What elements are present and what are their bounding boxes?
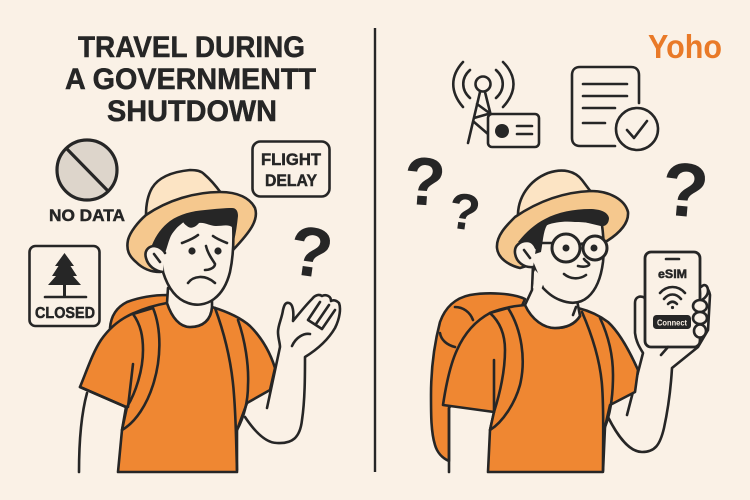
neck [167,288,212,327]
icon: no data sign [49,140,125,225]
icon: flight delay sign: DELAY [265,171,318,190]
facial features [578,259,589,267]
left arm [79,393,87,472]
backpack straps [490,308,523,430]
backpack [431,293,525,461]
title: A GOVERNMENTT [65,63,316,96]
question marks: right panel [401,143,712,242]
icon: document with checkmark [572,67,658,150]
backpack top [110,295,170,335]
glasses [541,234,607,262]
logo: Yoho: Yoho [648,28,722,65]
hair [152,208,238,253]
facial features [188,247,196,255]
smartphone [645,252,700,347]
figure: happy traveller with phone [431,171,710,472]
fingers [701,285,708,300]
arm and hand [608,287,710,452]
ear [145,246,165,272]
hat brim [497,191,628,268]
icon: no data sign: NO DATA [49,206,125,225]
question marks: right panel: ? [401,143,448,221]
hat brim [127,192,256,272]
ear [515,241,536,267]
question marks: right panel: ? [445,181,484,242]
question marks: right panel: ? [658,146,712,235]
raised arm and hand [245,295,340,443]
hat crown [146,170,221,225]
smartphone: eSIM [658,267,687,281]
title: TRAVEL DURING [78,31,305,64]
hat crown [518,171,591,225]
backpack straps [122,308,159,430]
icon: flight delay sign: FLIGHT [261,150,322,169]
question mark: left panel: ? [284,211,338,294]
neck [525,265,580,328]
icon: cell tower and card [453,62,539,147]
face [530,215,604,303]
hair [518,209,609,254]
icon: closed park sign [30,246,100,326]
title: SHUTDOWN [107,95,277,128]
t-shirt [443,305,638,472]
title [65,31,316,128]
smartphone: Connect [657,318,687,328]
face [160,215,233,305]
icon: closed park sign: CLOSED [35,305,95,322]
icon: flight delay sign [252,142,330,196]
t-shirt [80,303,275,472]
left arm [448,408,450,472]
figure: worried traveller [79,170,340,472]
